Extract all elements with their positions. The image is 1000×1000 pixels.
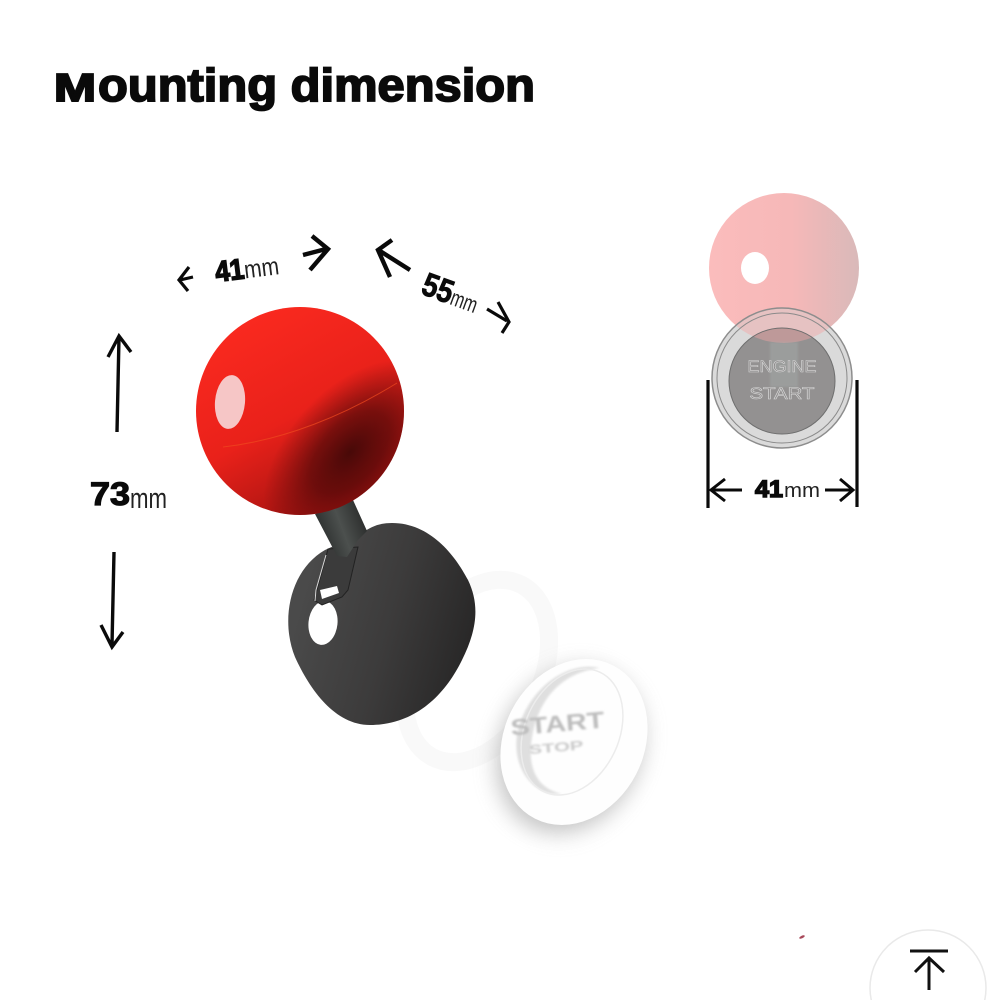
front view: engine start button bbox=[708, 193, 859, 508]
sphere showing through button bbox=[736, 308, 830, 343]
faint gasket ring bbox=[376, 556, 578, 786]
button cap engraving: START bbox=[509, 707, 605, 741]
button cap shadow bbox=[469, 642, 671, 858]
red knob bbox=[196, 307, 404, 515]
button rings bbox=[712, 308, 852, 448]
red speck bbox=[799, 935, 805, 939]
dimension: 41mm width label bbox=[179, 236, 328, 291]
arrow: 55mm right bbox=[487, 302, 509, 333]
label: 41mm bbox=[213, 249, 281, 289]
icon: arrow to top bbox=[910, 951, 948, 990]
label: 73mm: 73 bbox=[90, 476, 130, 512]
arrow: 41mm left bbox=[711, 479, 742, 501]
button text: START bbox=[750, 384, 814, 403]
gear lever bracket bbox=[314, 547, 358, 605]
arrow: 41mm right bbox=[303, 236, 328, 270]
dimension: 55mm depth label bbox=[378, 240, 509, 333]
stem seen through button bbox=[770, 342, 798, 387]
bracket slot bbox=[320, 586, 339, 599]
title: M bbox=[54, 67, 96, 110]
button cap engraving: STOP bbox=[528, 737, 585, 757]
button text bbox=[748, 357, 816, 403]
arrow: 73mm up bbox=[108, 336, 131, 432]
label: 41mm: 41 bbox=[213, 254, 246, 289]
black base dome bbox=[288, 523, 475, 725]
gear lever stem bbox=[315, 500, 367, 557]
button cap disc bbox=[473, 634, 675, 850]
label: 41mm bbox=[755, 476, 820, 503]
red sphere bbox=[196, 307, 404, 515]
button bezel bbox=[712, 308, 852, 448]
button circle bbox=[870, 930, 986, 1000]
arrow: 41mm left bbox=[179, 267, 193, 291]
exploded product: gear knob and button parts bbox=[196, 307, 675, 858]
button cap inner edge bbox=[502, 652, 642, 812]
sphere highlight bbox=[213, 374, 247, 430]
sphere seam bbox=[223, 383, 397, 447]
back to top button bbox=[870, 930, 986, 1000]
label: 73mm bbox=[90, 476, 167, 515]
button face bbox=[729, 328, 835, 434]
button text: ENGINE bbox=[748, 357, 816, 376]
dimension: 73mm height label bbox=[90, 336, 167, 647]
dome highlight bbox=[306, 600, 340, 646]
ghost sphere highlight bbox=[741, 252, 769, 284]
button cap engraving bbox=[509, 707, 607, 759]
label: 55mm: mm bbox=[447, 284, 481, 318]
label: 55mm bbox=[417, 265, 484, 320]
arrow: 55mm left bbox=[378, 240, 410, 277]
label: 41mm: mm bbox=[784, 480, 820, 502]
dimension bars bbox=[708, 380, 857, 508]
label: 41mm: mm bbox=[242, 252, 281, 284]
button cap inner rim bbox=[516, 667, 600, 794]
button cap bbox=[469, 634, 675, 858]
arrow: 73mm down bbox=[101, 552, 123, 647]
label: 41mm: 41 bbox=[755, 476, 783, 503]
arrow: 41mm right bbox=[825, 479, 853, 501]
bracket body bbox=[314, 547, 358, 605]
title: ounting dimension bbox=[98, 59, 535, 111]
label: 73mm: mm bbox=[130, 483, 167, 515]
label: 55mm: 55 bbox=[417, 265, 459, 311]
bracket rim bbox=[315, 555, 326, 601]
sphere shading bbox=[196, 307, 404, 515]
pink ghost sphere bbox=[709, 193, 859, 343]
